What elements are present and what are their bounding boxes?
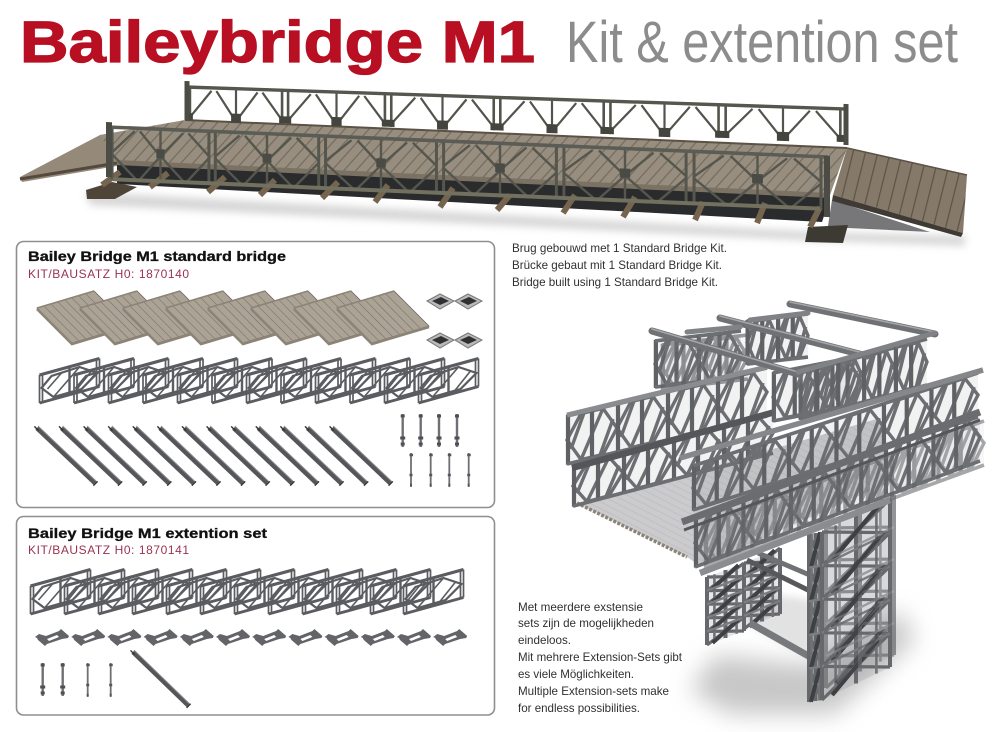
right front truss (680, 370, 984, 573)
bridge ground shadow (85, 192, 965, 246)
text: extension note (518, 600, 683, 715)
pins (40, 663, 113, 697)
text: extension note: es viele Möglichkeiten. (518, 667, 634, 681)
front tower (809, 495, 894, 702)
front truss rail (107, 122, 828, 217)
ground shadow (690, 610, 915, 714)
left base plate (86, 182, 137, 199)
timber transoms (102, 172, 820, 227)
bridge deck with planks (100, 120, 847, 195)
brackets row (35, 629, 467, 646)
transom bars row (36, 426, 391, 484)
connecting beams between towers (747, 553, 812, 658)
top beams (652, 302, 935, 374)
kit number: KIT/BAUSATZ H0: 1870140 (28, 267, 189, 281)
truss panels row (30, 570, 464, 614)
rear tower (707, 548, 780, 645)
left ramp (20, 120, 190, 182)
base plates (427, 294, 482, 348)
shade between towers (745, 590, 812, 660)
photo: assembled bridge (20, 81, 967, 246)
text: extension note: Mit mehrere Extension-Sets gibt (518, 650, 683, 664)
photo: extended bridge tower (567, 302, 984, 714)
text: extension note: eindeloos. (518, 633, 571, 647)
rear upper trusses (655, 313, 927, 420)
deck plates row (37, 291, 429, 344)
bridge deck (577, 418, 895, 566)
transom bar (132, 650, 189, 706)
text: extension note: Multiple Extension-sets make (518, 684, 669, 698)
right ramp with planks (833, 148, 967, 233)
pins (400, 414, 471, 487)
panel: extention set (16, 516, 494, 715)
central cross frame (773, 355, 860, 422)
text: extension note: for endless possibilities. (518, 701, 640, 715)
panel: standard bridge kit (16, 242, 494, 508)
panel frame (16, 242, 494, 508)
title: Baileybridge M1: Baileybridge M1 (20, 10, 535, 75)
text: extension note: sets zijn de mogelijkheden (518, 616, 654, 630)
dark underside (117, 165, 830, 222)
back truss rail (185, 81, 847, 145)
panel frame (16, 516, 494, 715)
text: standard kit note: Brücke gebaut mit 1 Standard Bridge Kit. (512, 258, 722, 272)
truss panels row (40, 358, 478, 403)
text: standard kit note: Bridge built using 1 Standard Bridge Kit. (512, 275, 718, 289)
text: standard kit note (512, 241, 727, 289)
panel heading: Bailey Bridge M1 extention set (28, 525, 267, 541)
text: extension note: Met meerdere exstensie (518, 600, 643, 614)
text: standard kit note: Brug gebouwd met 1 Standard Bridge Kit. (512, 241, 727, 255)
kit number: KIT/BAUSATZ H0: 1870141 (28, 543, 189, 557)
panel heading: Bailey Bridge M1 standard bridge (28, 248, 286, 264)
right base plate (805, 225, 848, 243)
left long truss (567, 367, 775, 507)
